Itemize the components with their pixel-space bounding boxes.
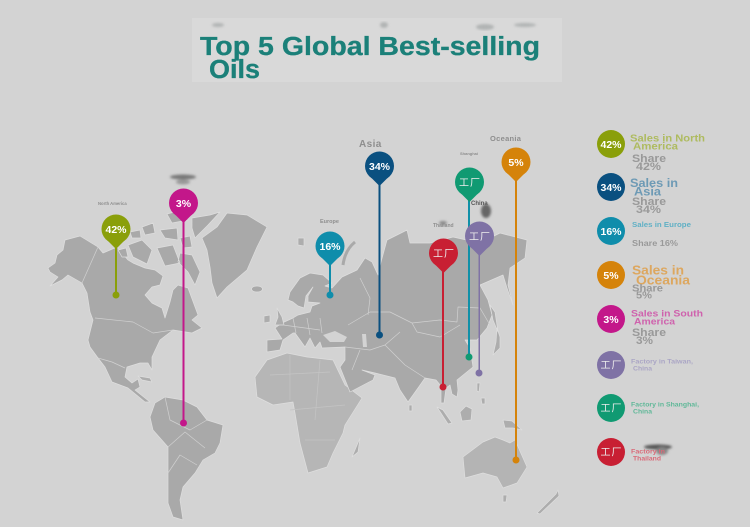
pin: Taiwan factory [465,222,494,376]
landmass: Eurasia [267,230,527,403]
Novaya Zemlya [343,242,355,265]
heading: Oceania [636,274,691,288]
share: Share [632,153,666,165]
label: Thailand: Thailand [433,223,454,229]
legend: Taiwan factory [597,351,693,379]
share [632,284,663,302]
pin: Oceania 5%: 5% [508,157,524,169]
heading [631,402,699,416]
label: Asia: Asia [359,139,382,150]
heading: China [633,408,652,416]
pin: North America 42%: 42% [105,224,127,236]
share: 34% [636,204,661,216]
heading: Sales in Europe [632,220,691,229]
pin: Asia 34%: 34% [369,161,391,173]
Iceland [252,286,262,292]
share: Share 16% [632,238,678,248]
share: 42% [636,161,661,173]
heading: Factory in Taiwan, [631,358,693,366]
label: Shanghai: Shanghai [460,151,478,156]
heading [631,448,665,462]
share: 3% [636,335,653,347]
compression smudges [170,174,672,455]
label: China: China [471,201,488,207]
pin: Europe 16%: 16% [319,241,341,253]
legend: North America: 42% [600,139,622,151]
share: 5% [636,290,652,302]
pin: South America 3%: 3% [176,198,192,210]
share [632,327,666,347]
label: Europe: Europe [320,219,339,225]
heading: America [633,142,678,152]
share [632,196,666,216]
share: Share [632,327,666,339]
pin: Thailand factory: 工厂 [433,249,455,260]
heading [631,358,693,372]
heading: Sales in [630,178,678,190]
legend: Thailand factory [597,438,665,466]
inland seas [323,331,367,347]
heading: America [634,316,676,328]
legend: Oceania: 5% [603,270,619,282]
title: Oils [209,56,260,84]
landmass: Australia [463,437,527,488]
share: Share [632,284,663,294]
Africa borders [270,355,345,440]
pin: Asia 34% [365,152,394,338]
legend: Shanghai factory [597,394,699,422]
heading: Asia [634,186,662,198]
map labels [98,134,522,229]
landmass: Africa [255,353,362,473]
heading: Factory in Shanghai, [631,402,699,408]
heading [630,134,705,152]
landmass: islands [138,238,559,514]
title [200,33,540,84]
legend: Thailand factory: 工厂 [600,448,622,458]
legend: Oceania [597,261,691,302]
panel smudges [212,22,536,30]
legend: Asia [597,173,678,216]
heading [630,178,678,198]
pin: Thailand factory [429,238,458,390]
heading: Thailand [633,456,661,462]
legend: Europe [597,217,691,248]
country borders [82,247,490,473]
pin: Shanghai factory: 工厂 [459,178,481,189]
legend: South America: 3% [603,314,619,326]
landmass: Greenland [202,213,267,298]
title panel [192,18,562,84]
landmass: South America [150,397,223,520]
heading [632,264,691,288]
pin: North America 42% [102,214,130,298]
heading: China [633,366,652,372]
heading: Sales in South [631,308,703,320]
landmass: North America [48,236,202,402]
heading: Sales in [632,264,684,278]
pin: Shanghai factory [455,168,484,360]
legend: Shanghai factory: 工厂 [600,404,622,414]
heading [631,308,703,328]
pin: Oceania 5% [502,148,530,464]
legend: Asia: 34% [600,182,622,194]
pin: Taiwan factory: 工厂 [469,232,491,243]
world map [48,209,559,520]
landmass: Arctic islands [118,209,220,285]
pin: Europe 16% [316,232,344,298]
heading: Factory in [631,448,665,456]
heading: Sales in North [630,134,705,144]
legend: South America [597,305,703,347]
share: Share [632,196,666,208]
share [632,153,666,173]
label: Oceania: Oceania [490,134,522,143]
label: North America: North America [98,201,127,206]
title: Top 5 Global Best-selling [200,33,540,61]
pin: South America 3% [169,188,198,426]
legend: Taiwan factory: 工厂 [600,360,622,372]
legend: Europe: 16% [600,226,622,238]
legend: North America [597,130,705,173]
